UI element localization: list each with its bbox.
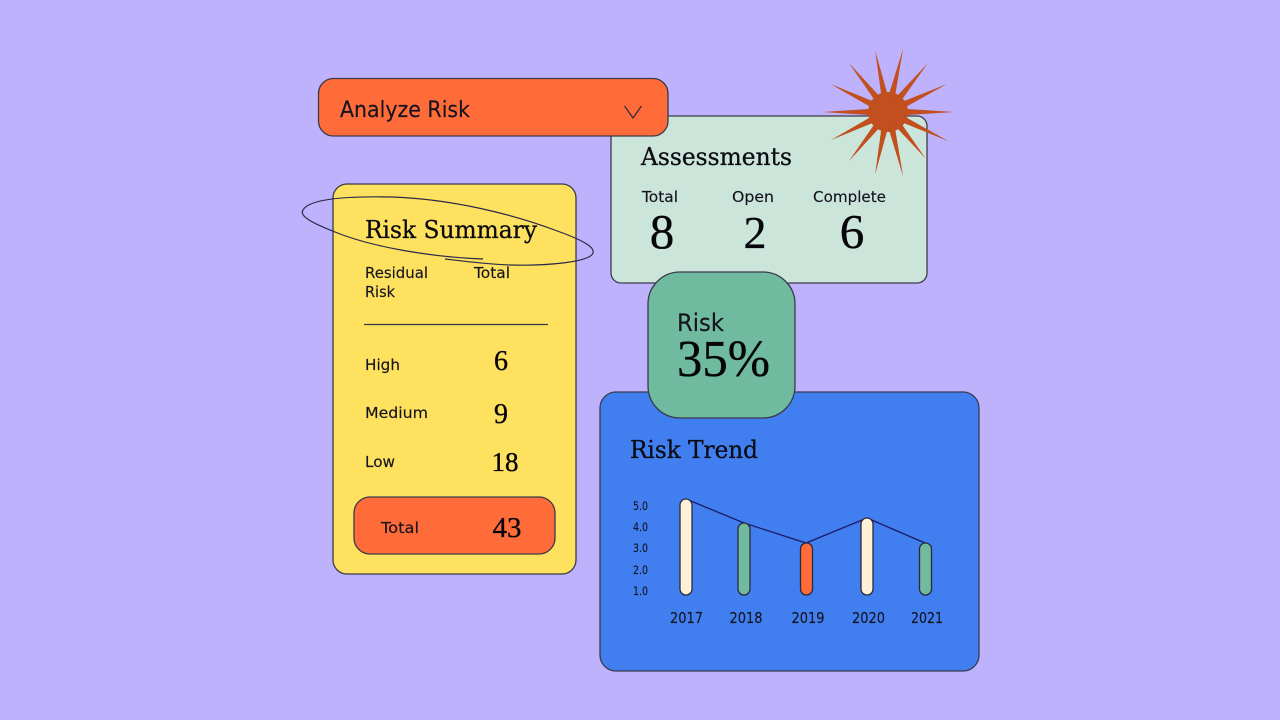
x axis labels: 2018 [730,609,762,627]
x axis labels: 2020 [852,609,885,627]
stat: total: 8 [650,204,674,259]
y axis labels: 3.0 [633,541,648,555]
panel: risk summary [333,184,576,574]
dropdown label: Analyze Risk [340,98,470,123]
total pill: 43 [492,512,522,544]
row: high [365,346,508,377]
row: medium: 9 [494,399,508,430]
stat: complete [813,188,886,259]
panel: risk trend [600,392,979,671]
row: high: 6 [494,346,508,377]
scribble ellipse around heading [302,197,593,265]
badge: risk 35%: Risk [677,309,724,337]
row: medium [365,399,508,430]
badge: risk 35%: 35% [677,331,770,388]
stat: open: 2 [744,207,766,258]
dropdown: analyze risk [318,78,668,136]
y axis labels: 1.0 [633,584,648,598]
total pill [354,497,555,554]
row: low [365,447,518,477]
heading: risk trend: Risk Trend [630,435,758,464]
stat: complete: Complete [813,188,886,206]
heading: assessments: Assessments [640,142,792,171]
row: medium: Medium [365,404,428,422]
x axis labels: 2021 [911,609,943,627]
x axis labels: 2019 [792,609,824,627]
heading: risk summary: Risk Summary [365,215,537,244]
row: low: Low [365,453,395,471]
icon: chevron [624,106,642,118]
y axis labels [633,499,648,598]
row: low: 18 [492,447,518,477]
total pill: Total [380,519,419,537]
trend line [686,499,925,543]
row: high: High [365,356,400,374]
column header: residual risk: Residual [365,264,428,282]
y axis labels: 4.0 [633,520,648,534]
stat: total: Total [641,188,678,206]
icon: starburst [823,48,954,177]
bars [680,499,932,595]
stat: total [641,188,678,259]
column header: total: Total [473,264,510,282]
y axis labels: 2.0 [633,563,648,577]
column header: residual risk: Risk [365,283,395,301]
stat: open [732,188,774,258]
column header: residual risk [365,264,428,301]
stat: open: Open [732,188,774,206]
x axis labels: 2017 [670,609,703,627]
bar chart [633,499,943,627]
stat: complete: 6 [840,204,864,259]
badge: risk 35% [648,272,795,418]
panel: assessments [611,116,927,283]
x axis labels [670,609,943,627]
y axis labels: 5.0 [633,499,648,513]
